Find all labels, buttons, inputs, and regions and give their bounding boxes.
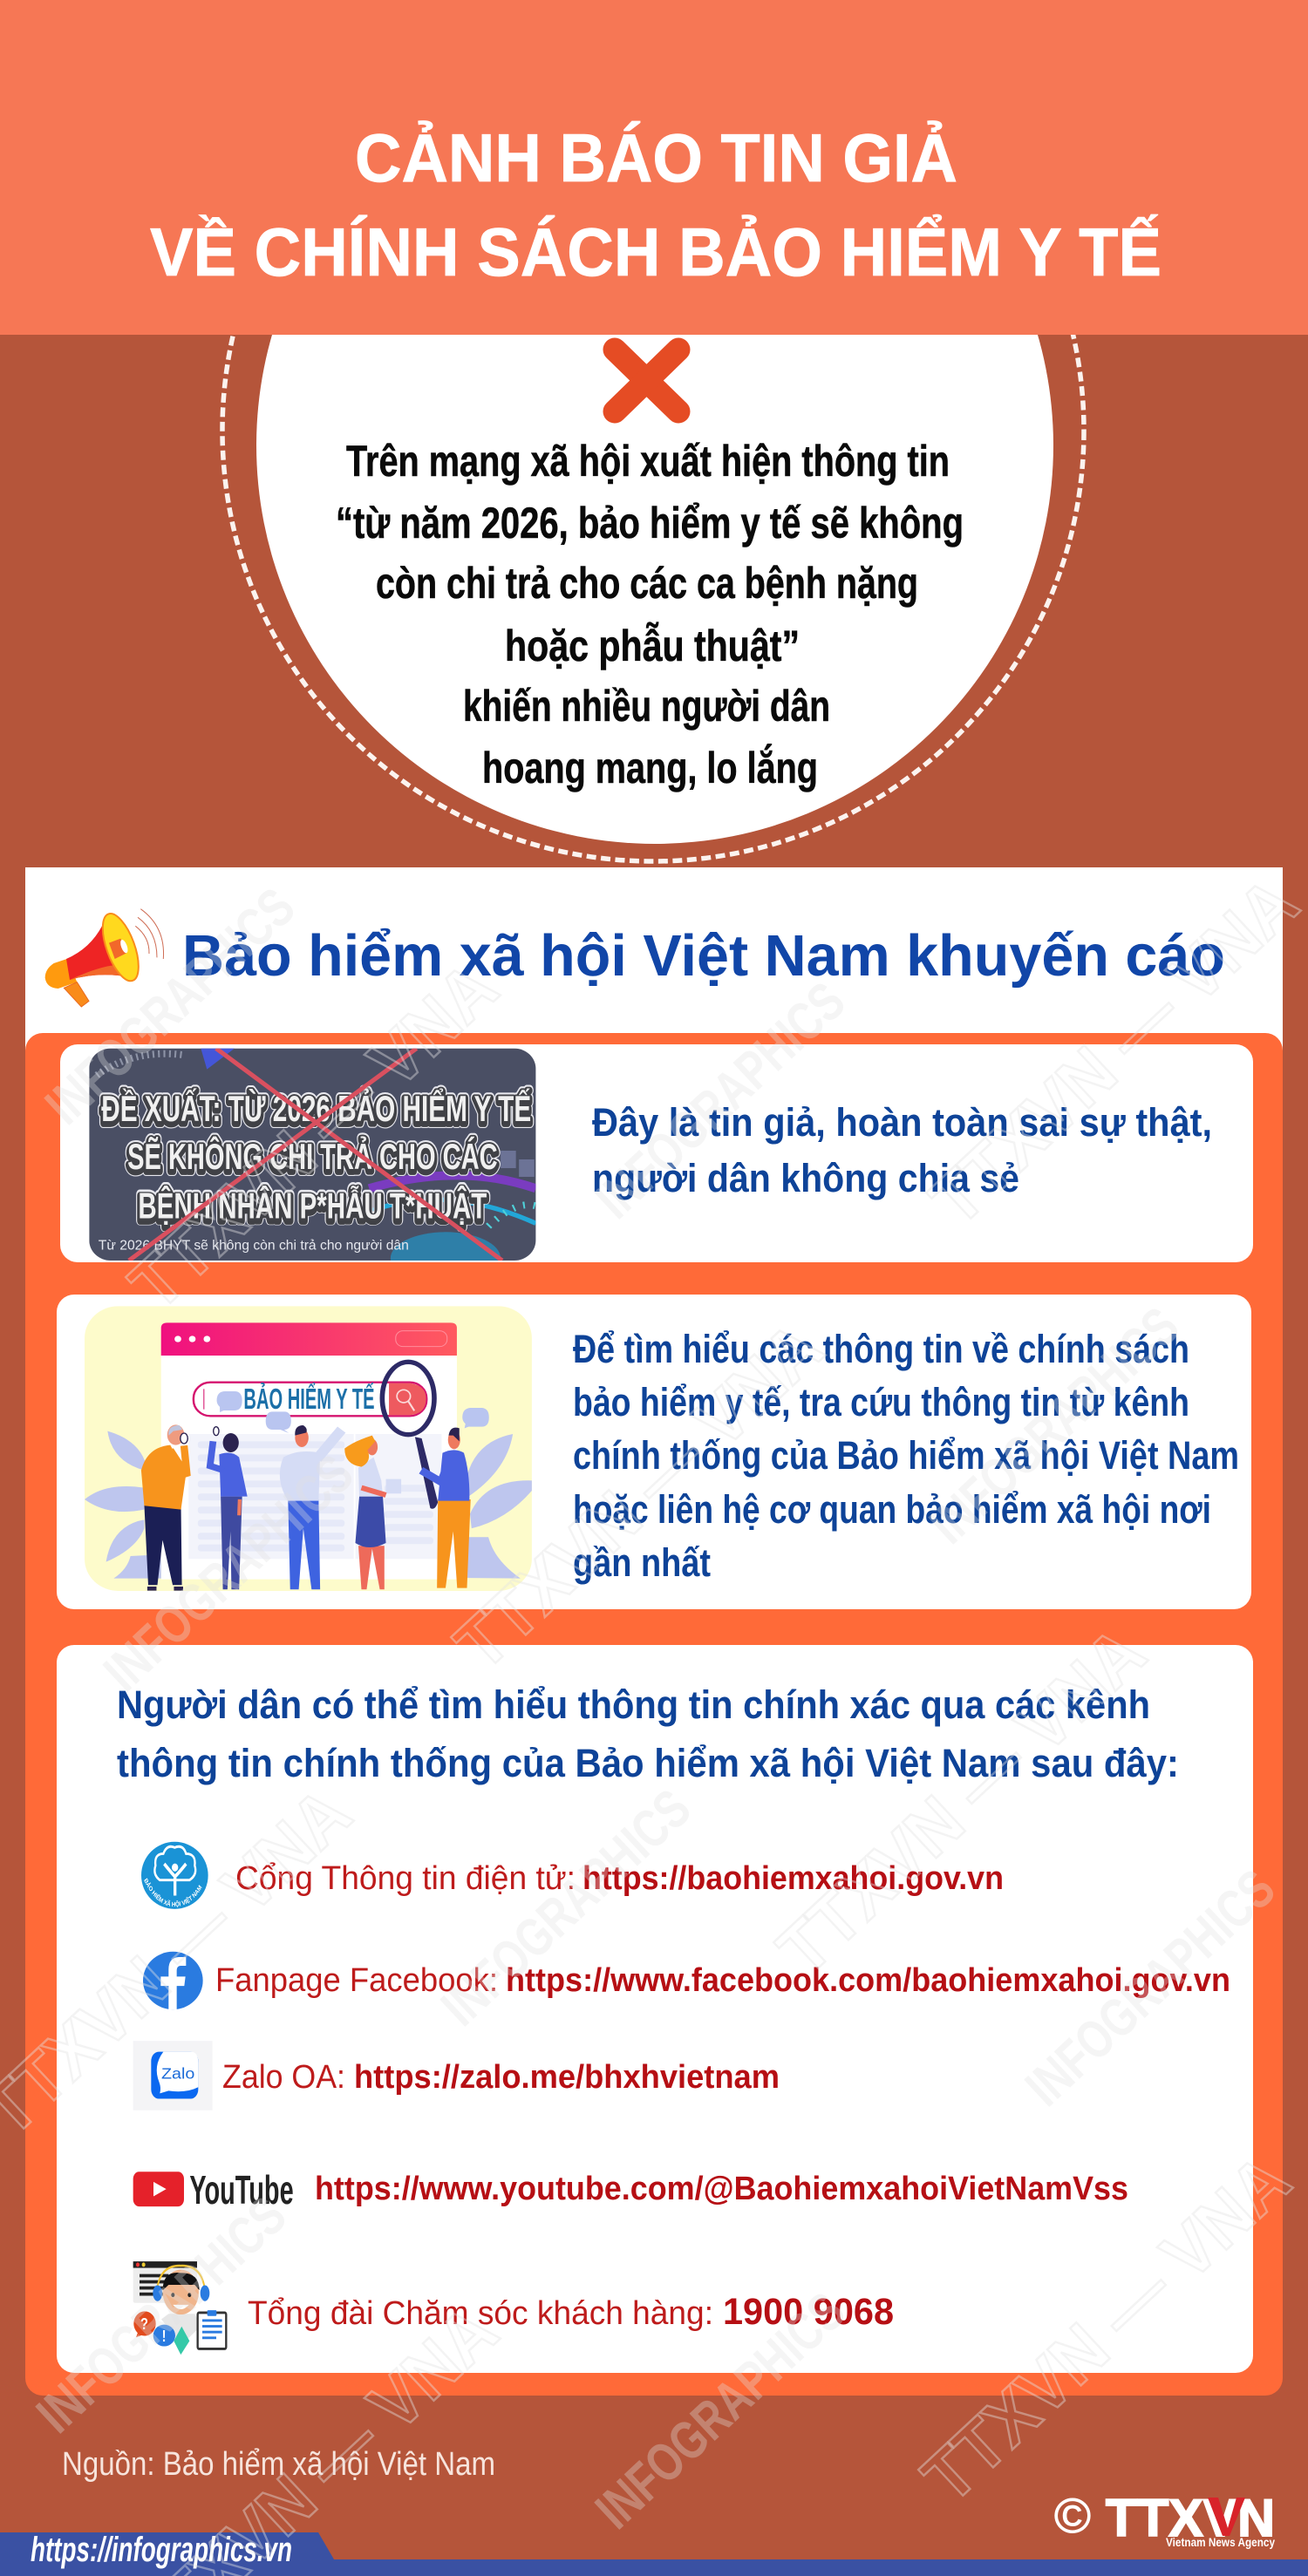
image: people searching health insurance: [85, 1306, 532, 1591]
person: woman with laptop: [344, 1436, 401, 1589]
text block: how to look up: gần nhất: [573, 1540, 711, 1585]
icon: youtube: [133, 2167, 294, 2212]
image: crossed-out fake post: ĐỀ XUẤT: TỪ 2026 BẢO HIỂM Y TẾ: [101, 1088, 531, 1129]
channel: hotline: [248, 2291, 894, 2333]
watermarks: INFOGRAPHICS: [34, 877, 306, 1136]
panel: orange container: [25, 1033, 1283, 2396]
source note: Nguồn: Bảo hiểm xã hội Việt Nam: [62, 2446, 495, 2483]
footer bar with url: https://infographics.vn: [31, 2531, 292, 2569]
watermarks: INFOGRAPHICS: [918, 1296, 1190, 1555]
watermarks: TTXVN — VNA: [440, 1308, 838, 1685]
channel: facebook: https://www.facebook.com/baohiemxahoi.gov.vn: [506, 1962, 1230, 1999]
watermarks: INFOGRAPHICS: [25, 2185, 297, 2444]
channel: hotline: 1900 9068: [723, 2291, 894, 2333]
image: crossed-out fake post: SẼ KHÔNG CHI TRẢ CHO CÁC: [127, 1136, 498, 1177]
channel: facebook: Fanpage Facebook:: [215, 1962, 498, 1999]
watermarks: TTXVN — VNA: [763, 1613, 1161, 1990]
text block: fake news notice: Đây là tin giả, hoàn toàn sai sự thật,: [592, 1100, 1212, 1145]
text block: channels intro: Người dân có thể tìm hiểu thông tin chính xác qua các kênh: [117, 1682, 1150, 1727]
image: crossed-out fake post: ĐỀ XUẤT: TỪ 2026 BẢO HIỂM Y TẾ: [101, 1090, 531, 1131]
icon: zalo: Zalo: [161, 2066, 195, 2083]
person: old man: [141, 1424, 187, 1591]
panel: warning circle dashed ring: [222, 0, 1084, 861]
text block: fake news claim: hoang mang, lo lắng: [482, 744, 818, 792]
text block: fake news notice: [592, 1100, 1212, 1200]
icon: megaphone: [45, 909, 164, 1007]
title: [150, 119, 1162, 290]
text block: fake news claim: khiến nhiều người dân: [463, 682, 830, 731]
image: crossed-out fake post: BỆNH NHÂN P*HẪU T*HUẬT: [138, 1186, 487, 1226]
image: crossed-out fake post: [89, 1049, 535, 1284]
icon: customer service operator: [133, 2261, 226, 2355]
watermarks: INFOGRAPHICS: [430, 1778, 702, 2037]
image: crossed-out fake post: BỆNH NHÂN P*HẪU T*HUẬT: [138, 1187, 487, 1227]
header band: [0, 0, 1308, 335]
title: VỀ CHÍNH SÁCH BẢO HIỂM Y TẾ: [150, 214, 1162, 290]
icon: social insurance logo: BẢO HIỂM XÃ HỘI VIỆT NAM: [144, 1878, 202, 1907]
logo: TTXVN: TTXVN: [1106, 2489, 1275, 2547]
logo: TTXVN: ©: [1054, 2488, 1091, 2543]
watermarks: INFOGRAPHICS: [584, 971, 856, 1230]
card: fake news: [60, 1044, 1253, 1284]
search bar: BẢO HIỂM Y TẾ: [243, 1382, 375, 1416]
channel icons: [133, 1841, 294, 2355]
chat bubbles: [266, 1408, 489, 1433]
panel: recommendation heading background: [25, 867, 1283, 1059]
watermarks: [0, 863, 1308, 2576]
title: CẢNH BÁO TIN GIẢ: [355, 119, 957, 196]
channel: web portal: [235, 1860, 1004, 1897]
logo: TTXVN: Vietnam News Agency: [1166, 2535, 1275, 2549]
image: crossed-out fake post: BỆNH NHÂN P*HẪU T*HUẬT: [138, 1187, 487, 1228]
plants: [85, 1431, 532, 1579]
channel: zalo: https://zalo.me/bhxhvietnam: [354, 2059, 780, 2096]
text block: fake news claim: “từ năm 2026, bảo hiểm y tế sẽ không: [336, 499, 964, 547]
watermarks: INFOGRAPHICS: [584, 2281, 856, 2540]
text block: fake news claim: hoặc phẫu thuật”: [505, 622, 800, 670]
card: official channels: [57, 1645, 1253, 2373]
image: crossed-out fake post: SẼ KHÔNG CHI TRẢ CHO CÁC: [127, 1138, 498, 1179]
image: crossed-out fake post: SẼ KHÔNG CHI TRẢ CHO CÁC: [127, 1138, 498, 1179]
person: man pointing: [280, 1425, 342, 1589]
icon: customer service operator: ?: [140, 2315, 148, 2333]
search bar: [194, 1382, 426, 1416]
channel: zalo: Zalo OA:: [222, 2059, 345, 2096]
text block: how to look up: bảo hiểm y tế, tra cứu thông tin từ kênh: [573, 1380, 1189, 1424]
watermarks: INFOGRAPHICS: [92, 1444, 364, 1703]
text block: how to look up: Để tìm hiểu các thông tin về chính sách: [573, 1327, 1189, 1371]
channel: hotline: Tổng đài Chăm sóc khách hàng:: [248, 2295, 713, 2332]
text block: channels intro: [117, 1682, 1179, 1785]
icon: facebook: [143, 1952, 203, 2009]
browser window: [161, 1322, 457, 1580]
panel: warning white circle: [256, 47, 1053, 844]
image: crossed-out fake post: Từ 2026 BHYT sẽ không còn chi trả cho người dân: [99, 1239, 409, 1253]
icon: social insurance logo: [141, 1841, 208, 1909]
image: crossed-out fake post: ĐỀ XUẤT: TỪ 2026 BẢO HIỂM Y TẾ: [101, 1091, 531, 1131]
channel: web portal: https://baohiemxahoi.gov.vn: [582, 1860, 1004, 1897]
icon: zalo: [133, 2041, 213, 2110]
channel: web portal: Cổng Thông tin điện tử:: [235, 1860, 576, 1897]
watermarks: TTXVN — VNA: [115, 948, 513, 1325]
text block: how to look up: [573, 1327, 1239, 1585]
person: man with magnifier: [382, 1362, 471, 1588]
channel: youtube: https://www.youtube.com/@BaohiemxahoiVietNamVss: [315, 2171, 1128, 2207]
heading: recommendation: Bảo hiểm xã hội Việt Nam khuyến cáo: [182, 923, 1225, 989]
text block: fake news claim: còn chi trả cho các ca bệnh nặng: [376, 559, 918, 608]
text block: fake news notice: người dân không chia sẻ: [592, 1156, 1019, 1200]
text block: channels intro: thông tin chính thống của Bảo hiểm xã hội Việt Nam sau đây:: [117, 1741, 1179, 1785]
text block: fake news claim: [336, 437, 964, 792]
card: how to look up information: [57, 1295, 1251, 1609]
channel: facebook: [215, 1962, 1230, 1999]
icon: youtube: YouTube: [189, 2167, 294, 2212]
text block: fake news claim: Trên mạng xã hội xuất hiện thông tin: [346, 437, 950, 486]
person: woman in blue: [210, 1427, 248, 1589]
icon: customer service operator: !: [162, 2328, 167, 2346]
footer bar with url: [0, 2531, 1308, 2576]
icon: red cross: [615, 350, 678, 411]
